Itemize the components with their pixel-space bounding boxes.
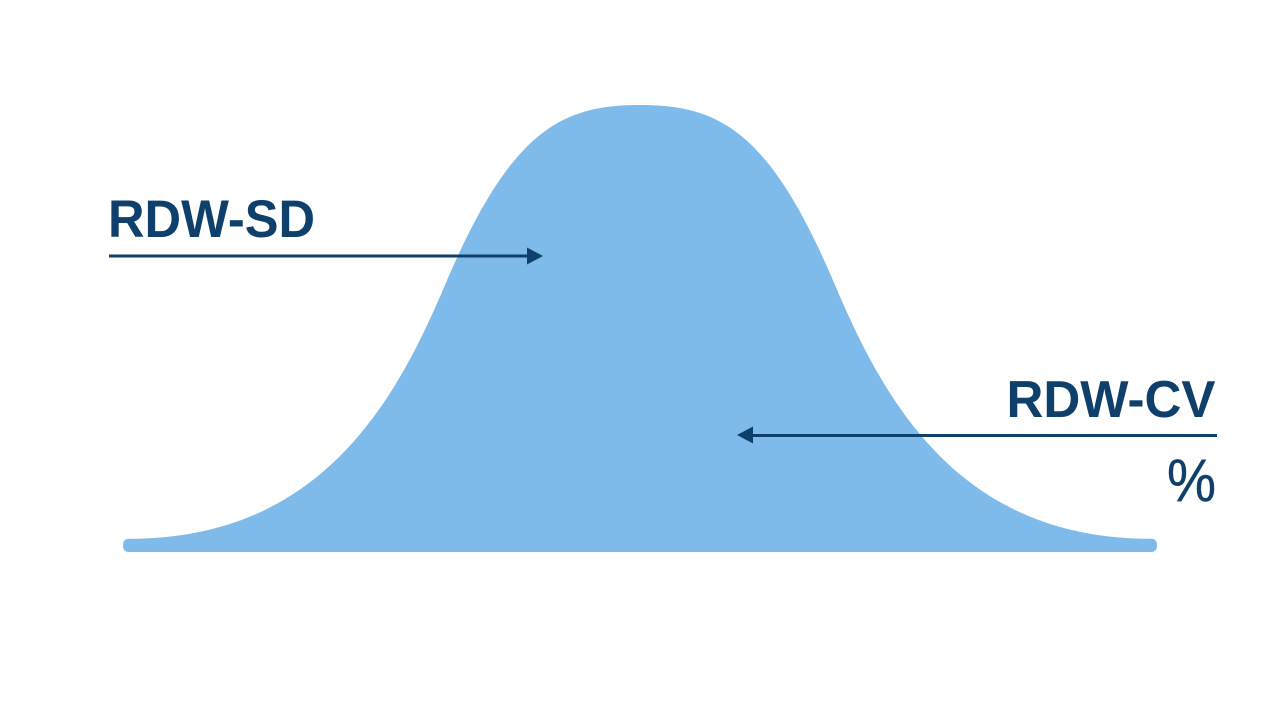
arrow: RDW-SD pointing right [109,248,543,264]
label: percent sign: % [1167,447,1216,514]
label: RDW-CV: RDW-CV [1006,371,1216,429]
chart: bell curve [123,105,1157,552]
label: RDW-SD: RDW-SD [108,190,315,249]
arrow: RDW-CV pointing left [737,426,1217,444]
